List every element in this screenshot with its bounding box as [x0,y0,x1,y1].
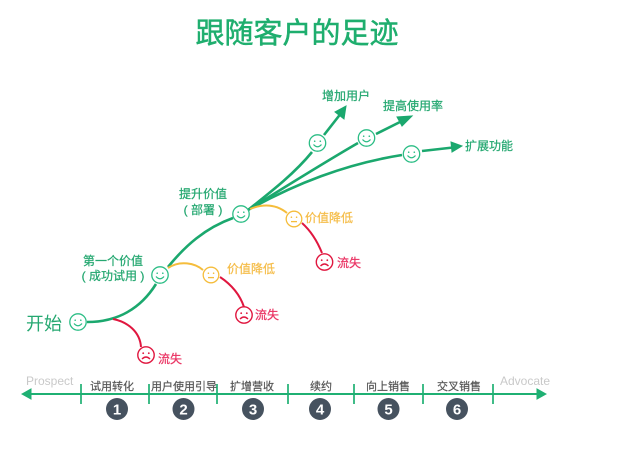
stage number badges: 6 [453,402,461,418]
icon: add users smiley [309,135,326,151]
arrow: add users [324,106,346,135]
timeline axis [22,384,546,404]
icon: first value smiley [152,267,168,283]
label: churn 3: 流失 [337,255,361,270]
label: advocate: Advocate [500,374,550,388]
stage number badges: 1 [113,402,121,418]
stage labels: 试用转化 [90,379,134,393]
label: raise value: 提升价值 [179,186,227,201]
stage number badges: 2 [179,402,188,418]
stage labels: 交叉销售 [437,379,481,393]
label: deployment: ( 部署 ) [184,202,222,217]
icon: start smiley [70,314,86,330]
branch: value drop and churn [113,206,322,347]
icon: raise usage smiley [358,130,375,146]
label: successful trial: ( 成功试用 ) [82,268,144,283]
label: prospect: Prospect [26,374,74,388]
title: 跟随客户的足迹 [195,17,399,50]
label: value drop 2: 价值降低 [305,210,353,225]
icon: sad face 3 [316,254,333,270]
stage number badges: 5 [384,402,393,418]
arrow: expand features [422,142,462,152]
icon: neutral face 1 [203,267,219,283]
stage labels: 扩增营收 [230,379,274,393]
label: start: 开始 [26,314,62,334]
label: churn 1: 流失 [158,351,182,366]
label: first value: 第一个价值 [83,253,143,268]
icon: sad face 1 [138,347,154,363]
stage labels [90,379,481,393]
label: churn 2: 流失 [255,307,279,322]
stage number badges [106,398,468,420]
icon: expand features smiley [403,146,420,162]
label: add users: 增加用户 [322,88,370,103]
stage number badges: 3 [249,402,257,418]
icon: deploy smiley [233,206,249,222]
icon: sad face 2 [236,307,252,323]
stage labels: 用户使用引导 [151,379,217,393]
stage number badges: 4 [316,402,325,418]
main growth curve [87,143,402,322]
label: value drop 1: 价值降低 [227,261,275,276]
label: raise usage: 提高使用率 [383,98,443,113]
stage labels: 向上销售 [366,379,410,393]
arrow: raise usage [376,116,412,134]
icon: neutral face 2 [286,211,302,227]
label: expand features: 扩展功能 [465,139,513,153]
stage labels: 续约 [310,379,332,393]
